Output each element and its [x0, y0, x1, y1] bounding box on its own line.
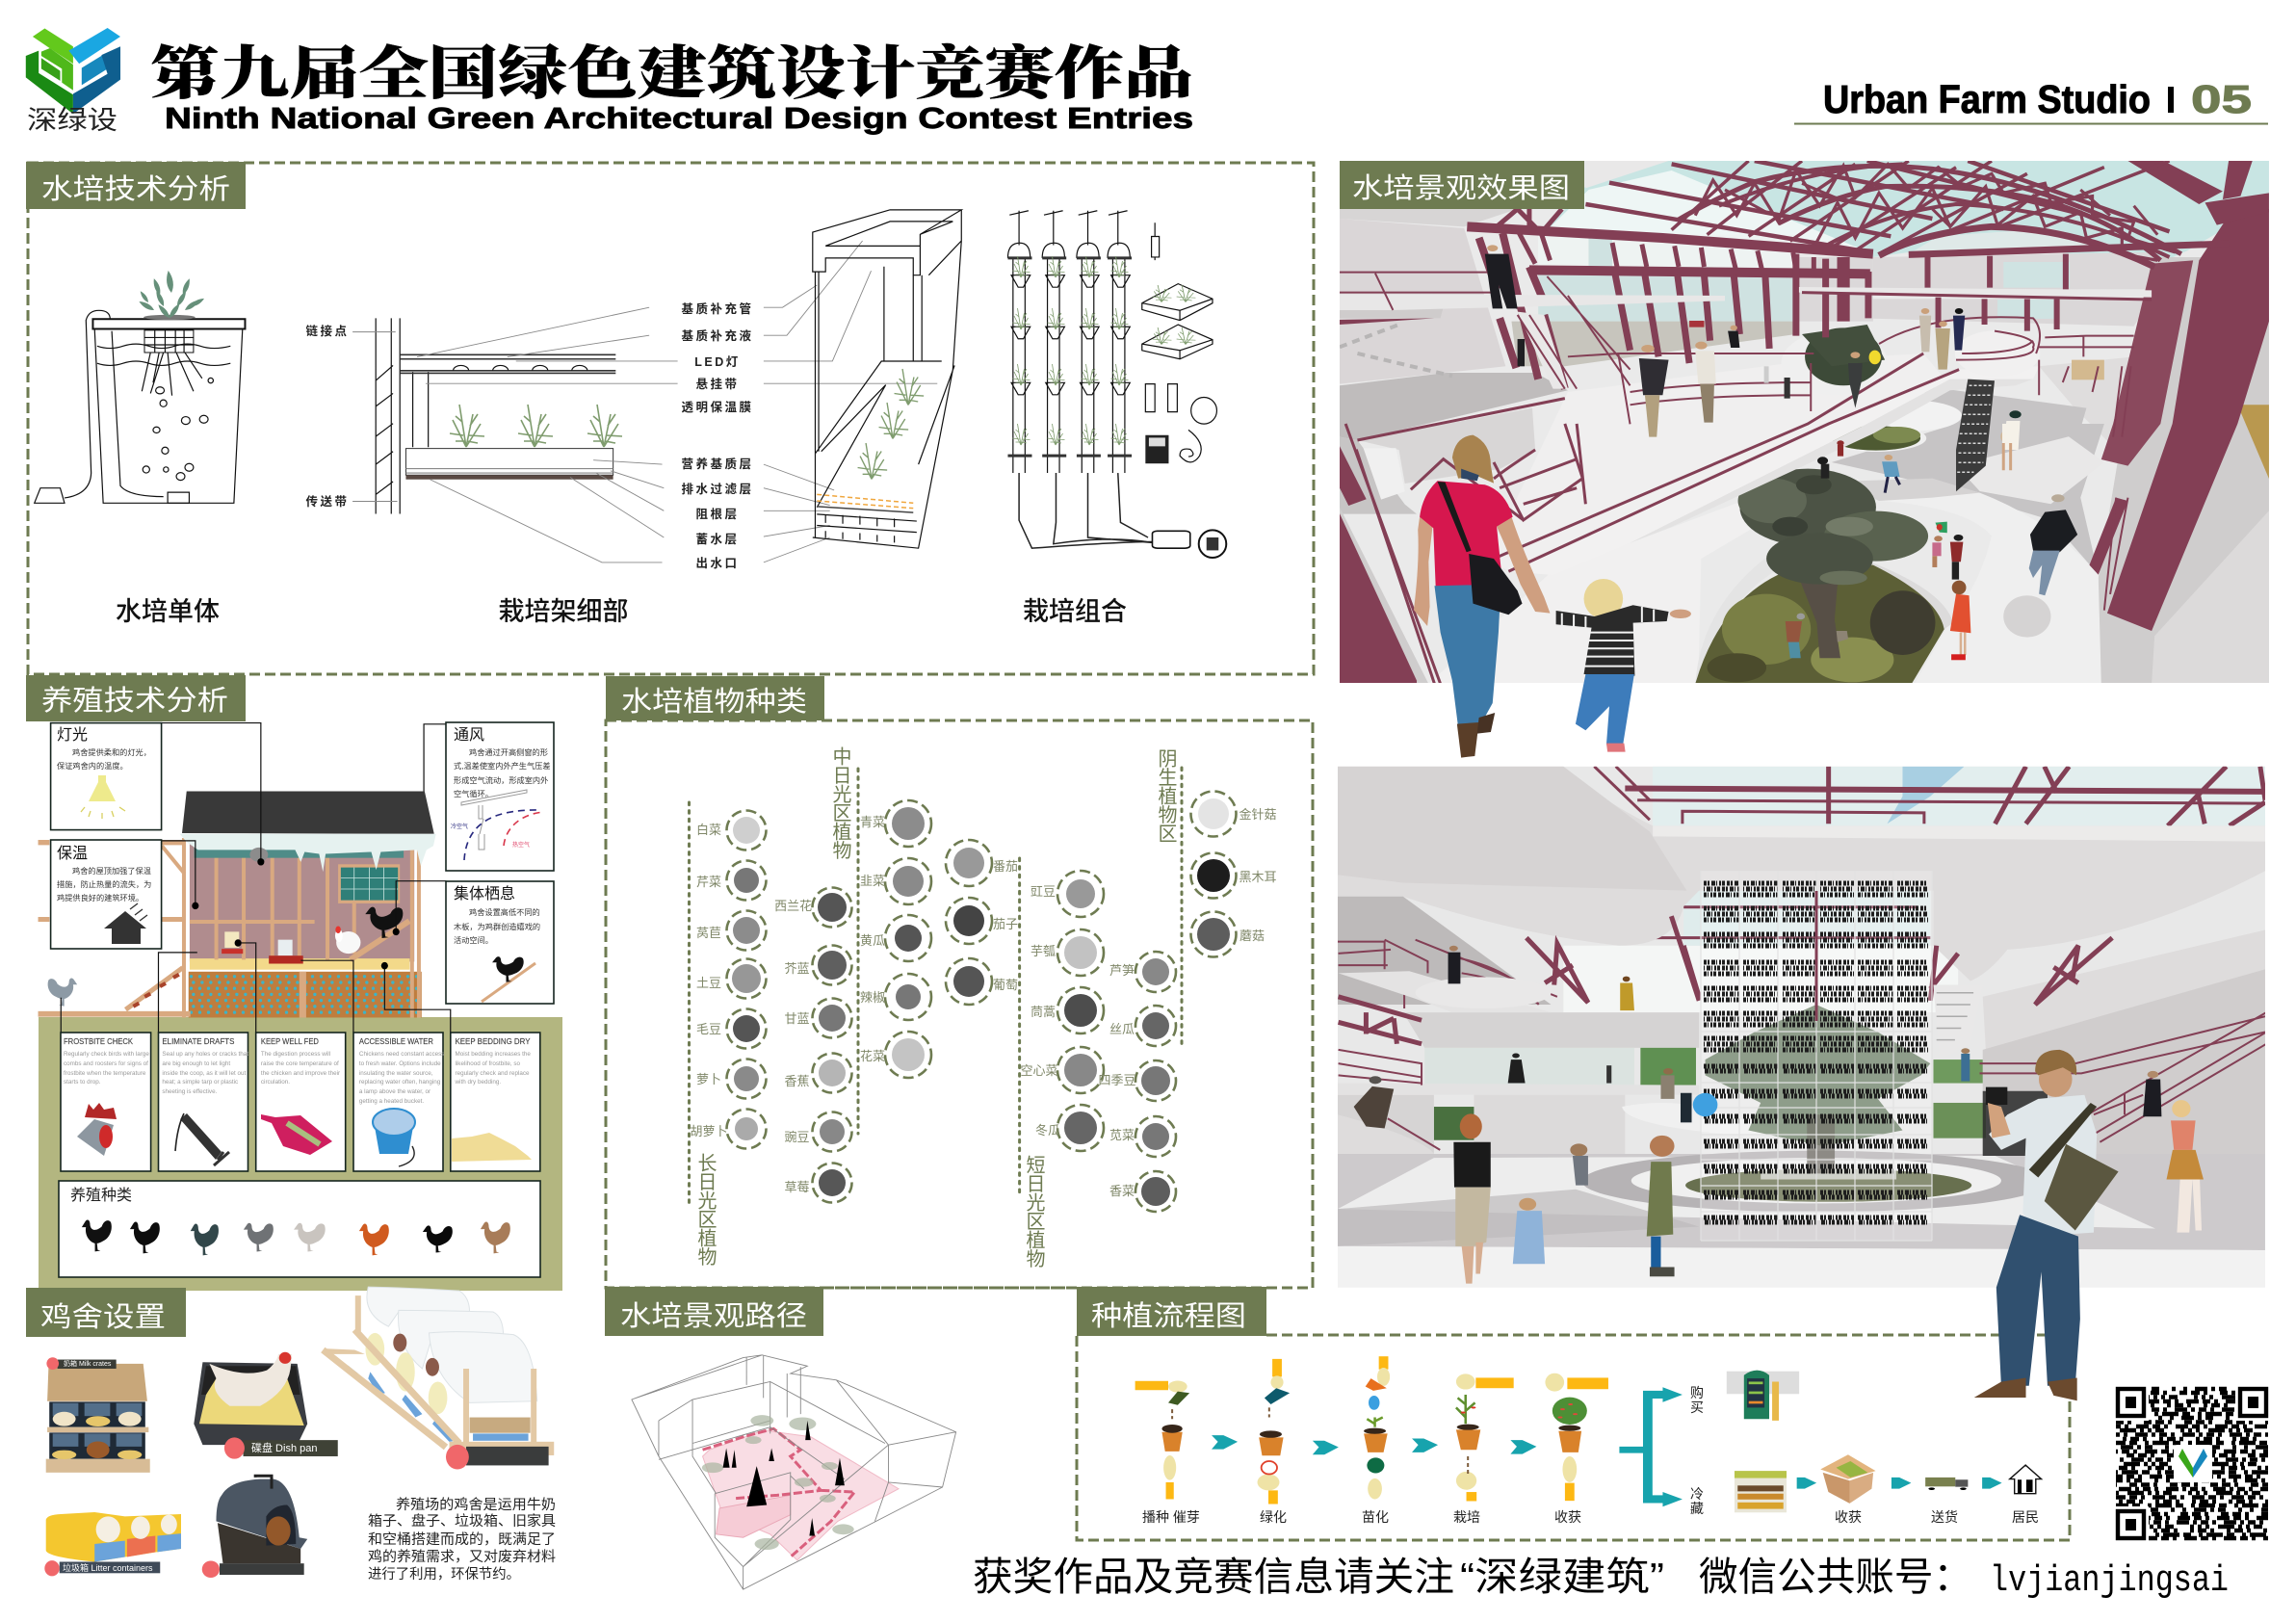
footer note — [973, 1555, 2229, 1602]
diagram: hydroponic unit — [35, 270, 245, 503]
breed illustrations — [82, 1219, 510, 1255]
plant items: 番茄 — [993, 859, 1018, 874]
diagram: rack perspective — [813, 210, 961, 548]
plant items: 苋菜 — [1109, 1128, 1135, 1142]
panel: hydroponic technology analysis — [26, 162, 1314, 674]
callout: group roost: 活动空间。 — [454, 935, 493, 945]
plant items: 蘑菇 — [1239, 929, 1265, 943]
card: accessible water: ACCESSIBLE WATER — [359, 1036, 433, 1046]
callout: ventilation — [446, 722, 554, 871]
callout: group roost: 鸡舍设置高低不同的 — [469, 907, 540, 917]
diagram: airflow arrows: 冷空气 — [451, 823, 468, 830]
plant items: 辣椒 — [860, 990, 885, 1005]
step labels: 绿化 — [1260, 1509, 1287, 1525]
render: hydroponic landscape view — [1340, 161, 2269, 758]
rack labels: 出水口 — [695, 556, 740, 570]
card: eliminate drafts: sheeting is effective. — [162, 1088, 218, 1095]
litter containers — [44, 1512, 181, 1576]
callout: ventilation: 鸡舍通过开高侧窗的形 — [469, 747, 548, 757]
diagram: rack detail — [305, 241, 937, 570]
plant items: 茄子 — [993, 917, 1018, 931]
back walls — [1539, 236, 1792, 268]
step labels: 收获 — [1554, 1509, 1581, 1525]
tub row — [323, 1287, 554, 1469]
card: keep bedding dry: regularly check and replace — [455, 1070, 530, 1077]
callout: insulation: 鸡提供良好的建筑环境。 — [57, 893, 144, 903]
card: accessible water: Chickens need constant access — [359, 1051, 444, 1058]
card: eliminate drafts: are big enough to let light — [162, 1060, 230, 1067]
card: accessible water: getting a heated bucket. — [359, 1098, 424, 1105]
plant items: 四季豆 — [1098, 1073, 1136, 1087]
plant items: 香菜 — [1109, 1184, 1135, 1198]
card: keep well fed: the chicken and improve their — [261, 1070, 340, 1077]
footer note: lvjianjingsai — [1990, 1560, 2229, 1602]
step labels: 苗化 — [1362, 1509, 1389, 1525]
plant items: 香蕉 — [784, 1074, 810, 1088]
studio tag: Urban Farm Studio — [1823, 77, 2151, 121]
plant items: 芥蓝 — [784, 961, 810, 976]
step labels — [1142, 1385, 2039, 1525]
plant items: 黄瓜 — [860, 933, 885, 948]
heading: hydroponic technology — [26, 162, 246, 209]
card: keep bedding dry — [451, 1033, 540, 1171]
rack labels: 透明保温膜 — [681, 400, 754, 414]
step labels: 买 — [1690, 1400, 1704, 1415]
panel: poultry technology analysis — [26, 675, 562, 1291]
card: frostbite check: combs and roosters for signs of — [64, 1060, 148, 1067]
callout: lighting: 保证鸡舍内的温度。 — [57, 761, 128, 771]
covered litter box — [202, 1476, 307, 1578]
plant items: 芋瓠 — [1031, 944, 1056, 958]
plant items: 金针菇 — [1239, 807, 1277, 822]
plant items: 土豆 — [696, 976, 721, 990]
callout: lighting — [51, 723, 162, 830]
lower small figures — [1786, 424, 2077, 660]
card: keep well fed: The digestion process will — [261, 1051, 330, 1058]
paragraph: coop materials: 进行了利用，环保节约。 — [368, 1566, 520, 1583]
plant items: 豇豆 — [1031, 884, 1056, 899]
heading: landscape render — [1340, 161, 1584, 209]
sleeves and hands — [1135, 1356, 1608, 1504]
plant items — [690, 792, 1277, 1212]
card: frostbite check: frostbite when the temperature — [64, 1070, 146, 1077]
pots — [1161, 1425, 1581, 1455]
people in atrium — [1354, 946, 2204, 1400]
tag: dish pan: 碟盘 Dish pan — [251, 1441, 317, 1454]
milk crate nest — [46, 1357, 150, 1473]
footer note: 获奖作品及竞赛信息请关注 — [973, 1555, 1454, 1599]
footer note: “深绿建筑” — [1460, 1555, 1664, 1599]
house — [2010, 1465, 2042, 1494]
rack labels: LED灯 — [694, 355, 741, 369]
heading: landscape path: 水培景观路径 — [620, 1294, 807, 1334]
rack labels: 营养基质层 — [681, 457, 754, 471]
plant items: 毛豆 — [696, 1022, 721, 1036]
diagram: airflow arrows: 热空气 — [512, 841, 530, 849]
plant items: 草莓 — [784, 1180, 810, 1194]
icon: bucket — [373, 1109, 415, 1166]
qr code — [2114, 1385, 2270, 1542]
rack labels: 排水过滤层 — [681, 482, 754, 496]
card: keep bedding dry: Moist bedding increases the — [455, 1051, 531, 1058]
logo wordmark: 深绿设 — [27, 106, 117, 135]
card: keep bedding dry: likelihood of frostbite, so — [455, 1060, 521, 1067]
caption: hydroponic unit: 水培单体 — [116, 597, 220, 626]
rack labels: 传送带 — [305, 494, 350, 509]
card: accessible water: to fresh water. Options include — [359, 1060, 441, 1067]
plant items: 芦笋 — [1109, 963, 1135, 978]
callout: ventilation: 形成空气流动，形成室内外 — [454, 775, 548, 785]
slabs — [1799, 287, 2152, 298]
plant items: 黑木耳 — [1239, 870, 1277, 884]
tree behind wall — [1706, 1005, 1930, 1146]
step labels: 送货 — [1931, 1509, 1958, 1525]
render: green wall atrium — [1338, 767, 2266, 1400]
rack labels: 阻根层 — [695, 508, 740, 521]
card: eliminate drafts — [158, 1033, 248, 1171]
box — [1820, 1454, 1876, 1504]
living plant wall — [1701, 871, 1932, 1241]
step labels: 播种 催芽 — [1142, 1509, 1200, 1525]
callout: group roost — [446, 881, 554, 1004]
dish pan nest — [194, 1352, 338, 1459]
illustration: chicken coop — [39, 723, 451, 1033]
card: accessible water: a lamp above the water, or — [359, 1088, 430, 1095]
callout: lighting: 鸡舍提供柔和的灯光， — [72, 747, 151, 757]
plant items: 冬瓜 — [1035, 1123, 1060, 1138]
icon: rooster on perch — [482, 956, 535, 1002]
lower scene — [1340, 401, 2104, 684]
sky and glass roof — [1551, 161, 2269, 257]
paragraph: coop materials: 养殖场的鸡舍是运用牛奶 — [396, 1497, 556, 1513]
rack labels: 悬挂带 — [695, 377, 740, 391]
railings — [1340, 272, 2152, 684]
callout: insulation — [51, 840, 162, 949]
panel: breeds: 养殖种类 — [70, 1187, 132, 1204]
panel: hydroponic plant types — [606, 676, 1313, 1288]
card: accessible water: insulating the water source, — [359, 1070, 433, 1077]
rack labels — [305, 301, 754, 570]
callout: insulation: 保温 — [57, 845, 88, 862]
tools and plants — [1168, 1378, 1587, 1475]
step labels: 冷 — [1690, 1486, 1704, 1502]
callout: lighting: 灯光 — [57, 726, 88, 744]
plant items: 茼蒿 — [1031, 1005, 1056, 1019]
plant items: 豌豆 — [784, 1130, 810, 1144]
group title: long day: 长日光区植物 — [694, 1153, 717, 1266]
small figures — [1485, 245, 2077, 660]
columns — [2107, 209, 2269, 631]
plant items: 葡萄 — [993, 978, 1018, 992]
panel: planting flow chart — [823, 1287, 2070, 1540]
caption: rack detail: 栽培架细部 — [499, 597, 628, 626]
refrigerated shelf — [1735, 1471, 1787, 1512]
plant items: 丝瓜 — [1109, 1022, 1135, 1036]
heading: landscape path — [605, 1287, 823, 1336]
plant items: 莴苣 — [696, 926, 721, 940]
group title: shade: 阴生植物区 — [1155, 748, 1177, 842]
callout: insulation: 鸡舍的屋顶加强了保温 — [72, 866, 151, 876]
card: keep bedding dry: with dry bedding. — [455, 1079, 501, 1086]
icon: rooster head — [77, 1103, 117, 1156]
callout: group roost: 木板，为鸡群创造嬉戏的 — [454, 922, 540, 931]
illustrations: nest boxes, tray, tub, bins, hood — [44, 1287, 554, 1578]
rack labels: 链接点 — [305, 324, 350, 338]
steel frames — [1338, 916, 2266, 1150]
leaves — [138, 270, 205, 320]
panel: breeds — [59, 1181, 540, 1277]
plant items: 花菜 — [860, 1049, 885, 1063]
icon: bulb — [81, 775, 125, 819]
dotted group axes — [690, 768, 1182, 1207]
callout: ventilation: 式,温差使室内外产生气压差 — [454, 761, 551, 771]
truck — [1925, 1478, 1968, 1490]
heading: poultry technology: 养殖技术分析 — [41, 678, 228, 719]
card: frostbite check: starts to drop. — [64, 1079, 101, 1086]
paragraph: coop materials: 箱子、盘子、垃圾箱、旧家具 — [368, 1512, 556, 1530]
heading: poultry technology — [26, 675, 246, 721]
diagram: planting combination — [1007, 211, 1226, 558]
vending machine — [1727, 1371, 1799, 1421]
step labels: 栽培 — [1453, 1509, 1480, 1525]
diagram: airflow arrows — [451, 790, 544, 860]
panel: landscape path — [605, 1287, 956, 1589]
steel truss — [1467, 161, 2229, 389]
footer note: 微信公共账号： — [1699, 1555, 1972, 1599]
heading: planting flow — [1077, 1287, 1266, 1336]
card: frostbite check: FROSTBITE CHECK — [64, 1036, 133, 1046]
card: accessible water — [353, 1033, 444, 1171]
callout: ventilation: 通风 — [454, 726, 484, 744]
callout: group roost: 集体栖息 — [454, 885, 515, 903]
icon: feed scoop — [261, 1114, 332, 1155]
card: frostbite check: Regularly check birds with large — [64, 1051, 149, 1058]
card: keep well fed: KEEP WELL FED — [261, 1036, 319, 1046]
background band — [39, 1017, 562, 1291]
callout: ventilation: 空气循环。 — [454, 789, 493, 798]
callout: insulation: 措施，防止热量的流失，为 — [57, 879, 151, 889]
rack labels: 基质补充液 — [681, 328, 754, 343]
heading: plant types — [606, 676, 824, 720]
studio tag — [1794, 77, 2268, 125]
heading: coop setup — [26, 1288, 186, 1337]
flow steps — [1135, 1356, 2042, 1525]
title english: Ninth National Green Architectural Design Contest Entries — [165, 101, 1193, 135]
card: eliminate drafts: heat; a simple tarp or plastic — [162, 1079, 238, 1086]
rack labels: 基质补充管 — [681, 301, 754, 316]
figure: photographer — [1974, 1050, 2119, 1400]
plant items: 白菜 — [696, 823, 721, 837]
paragraph: coop materials: 和空桶搭建而成的，既满足了 — [368, 1531, 556, 1548]
tower of planters — [1956, 379, 1995, 491]
bridge deck — [1832, 385, 1934, 441]
step labels: 收获 — [1835, 1509, 1862, 1525]
paragraph: coop materials — [368, 1497, 556, 1583]
icon: pump — [175, 1113, 229, 1165]
plant items: 西兰花 — [774, 899, 812, 913]
plant items: 萝卜 — [696, 1072, 721, 1086]
card: eliminate drafts: inside the coop, as it will let out — [162, 1070, 246, 1077]
card: eliminate drafts: ELIMINATE DRAFTS — [162, 1036, 235, 1046]
card: keep well fed: raise the core temperature of — [261, 1060, 339, 1067]
arrows — [1212, 1387, 2002, 1506]
plant items: 甘蓝 — [784, 1011, 810, 1026]
card: accessible water: replacing water often, hanging — [359, 1079, 441, 1086]
step labels: 居民 — [2012, 1509, 2039, 1525]
step labels: 购 — [1690, 1385, 1704, 1400]
heading: plant types: 水培植物种类 — [621, 679, 807, 719]
icon: house — [104, 903, 147, 944]
plant items: 青菜 — [860, 815, 885, 829]
plant items: 芹菜 — [696, 875, 721, 889]
heading: landscape render: 水培景观效果图 — [1352, 166, 1570, 206]
mid floors — [1340, 373, 1568, 440]
tag: milk crates: 奶箱 Milk crates — [64, 1359, 112, 1368]
planting clusters — [1013, 256, 1195, 445]
title chinese: 第九届全国绿色建筑设计竞赛作品 — [150, 28, 1193, 111]
plant items: 胡萝卜 — [690, 1124, 728, 1138]
figure: mother and child — [1414, 435, 1691, 758]
caption: planting combination: 栽培组合 — [1023, 597, 1127, 626]
heading: coop setup: 鸡舍设置 — [40, 1295, 166, 1335]
step labels: 藏 — [1690, 1501, 1704, 1516]
lower right floor — [2099, 257, 2269, 684]
plant items: 空心菜 — [1020, 1063, 1058, 1078]
studio tag: 05 — [2191, 77, 2252, 121]
diagram: isometric circulation — [632, 1355, 956, 1589]
heading: planting flow: 种植流程图 — [1091, 1294, 1246, 1334]
panel: coop setup — [26, 1287, 556, 1583]
card: keep well fed: circulation. — [261, 1079, 290, 1086]
icon: straw pile — [452, 1133, 532, 1162]
rack labels: 蓄水层 — [695, 532, 740, 546]
card: keep well fed — [256, 1033, 346, 1171]
card: keep bedding dry: KEEP BEDDING DRY — [455, 1036, 531, 1046]
paragraph: coop materials: 鸡的养殖需求，又对废弃材料 — [368, 1549, 556, 1565]
card: frostbite check — [61, 1033, 151, 1171]
tag: litter containers: 垃圾箱 Litter containers — [63, 1562, 153, 1573]
logo — [26, 28, 120, 135]
plant items: 韭菜 — [860, 874, 885, 888]
group title: medium day: 中日光区植物 — [829, 746, 851, 859]
card: eliminate drafts: Seal up any holes or cracks that — [162, 1051, 248, 1058]
group title: short day: 短日光区植物 — [1023, 1155, 1045, 1268]
heading: hydroponic technology: 水培技术分析 — [41, 167, 230, 207]
